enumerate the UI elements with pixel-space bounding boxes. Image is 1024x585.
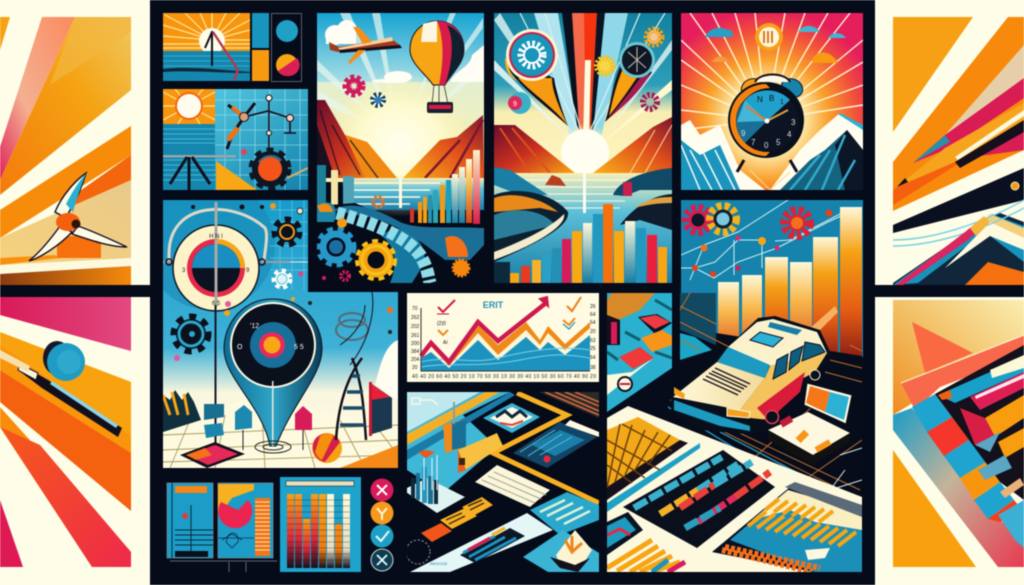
car hood xyxy=(673,362,765,410)
cream card with stripes xyxy=(410,513,553,572)
icon: alarm clock xyxy=(728,74,806,172)
icon: airplane xyxy=(329,27,402,64)
icon: blue disc xyxy=(43,341,85,381)
panel: colour table xyxy=(280,477,361,572)
icon: gold keyboard xyxy=(607,417,700,512)
y axis labels: 261 xyxy=(411,333,420,339)
mountains left xyxy=(317,100,397,178)
icon: alarm clock: N xyxy=(757,95,763,104)
table columns xyxy=(287,494,350,568)
orange block xyxy=(252,50,269,81)
y axis labels: 20 xyxy=(412,365,418,371)
icon: orange gear big xyxy=(360,244,392,276)
right axis labels: 25 xyxy=(590,346,596,352)
car side windows xyxy=(773,342,825,379)
mountains right xyxy=(403,115,484,178)
blue chevron layers xyxy=(893,213,1024,285)
icon: alarm clock: 9 xyxy=(741,129,746,138)
left pillars xyxy=(317,165,354,210)
icon: blue gear big xyxy=(321,232,351,262)
right axis labels xyxy=(590,304,596,371)
icon: laptop xyxy=(768,383,852,465)
icon: split circle xyxy=(276,54,300,76)
cream desk xyxy=(607,406,862,572)
car bumper xyxy=(674,400,750,431)
icon: teal check badge xyxy=(370,524,394,548)
trend line arrow xyxy=(421,297,548,362)
car roof xyxy=(728,319,827,366)
bar chart xyxy=(510,204,667,283)
icon: small target dot xyxy=(1011,182,1019,190)
icon: hot air balloon xyxy=(410,21,464,113)
area layers xyxy=(421,322,590,371)
gauge dial: 9 xyxy=(246,268,250,274)
icon: location pin with sun gear xyxy=(505,29,568,126)
scattered dots xyxy=(173,202,394,362)
post box xyxy=(443,402,466,453)
icon: tripod xyxy=(163,155,236,190)
y axis labels: 202 xyxy=(411,324,420,330)
gauge dial: H N I xyxy=(209,234,223,240)
car windshield xyxy=(717,347,770,378)
ball xyxy=(312,433,342,463)
icon: yellow sun middle xyxy=(597,58,613,74)
panel: sea sun with pole xyxy=(163,13,250,81)
panel: sun, pins and bar chart xyxy=(494,13,672,283)
horizontal black band left xyxy=(0,285,150,297)
label tags xyxy=(421,497,493,542)
icon: sun xyxy=(176,93,202,119)
small outlined icon xyxy=(412,398,438,405)
y axis labels: 70 xyxy=(412,306,418,312)
icon: red gear right xyxy=(785,211,809,235)
central black field xyxy=(150,0,875,585)
foreground hills xyxy=(317,202,484,283)
car side xyxy=(740,353,827,420)
right hills xyxy=(613,168,672,230)
icon: clouds blue and orange xyxy=(705,26,846,63)
y axis labels: 200 xyxy=(411,341,420,347)
panel: car and keyboards xyxy=(607,293,862,572)
icon: gold pen xyxy=(897,103,1024,187)
hatch corner xyxy=(539,392,599,418)
vertical pole xyxy=(214,305,216,455)
icon: black gear with orange hub xyxy=(252,151,308,187)
gold beam xyxy=(458,433,503,473)
floor grid xyxy=(162,414,399,469)
y axis labels: 204 xyxy=(411,357,420,363)
icon: alarm clock: 1 xyxy=(780,99,784,106)
right axis labels: 64 xyxy=(590,355,596,361)
icon: pen xyxy=(0,350,122,437)
gauge dial xyxy=(157,202,308,311)
colour bar chart tile xyxy=(712,482,862,572)
icon: car xyxy=(671,316,832,434)
y axis labels: 262 xyxy=(411,315,420,321)
icon: blue circle xyxy=(276,20,298,42)
icon: red dot xyxy=(241,149,247,155)
panel: large blue gauge and map pin xyxy=(162,199,399,469)
y axis labels xyxy=(411,306,420,371)
map pin xyxy=(224,299,322,453)
dark dotted circle xyxy=(406,540,430,564)
icon: crimson gear xyxy=(687,209,709,231)
dashboard screen xyxy=(513,420,599,468)
cream card with stripes: ARGOGE xyxy=(430,561,448,566)
mountains right xyxy=(593,117,672,173)
right screen xyxy=(218,483,273,558)
right axis labels: 63 xyxy=(590,338,596,344)
car red door xyxy=(757,372,805,422)
gauge dial: 6 5 xyxy=(212,301,221,307)
icon: gold triangle xyxy=(216,161,257,190)
map pin: 5 5 xyxy=(294,344,304,351)
teal keypad tile xyxy=(607,293,672,412)
chart dots xyxy=(692,210,832,296)
icon: crimson gear right xyxy=(643,95,657,109)
sun xyxy=(555,123,615,183)
car grille xyxy=(703,368,750,395)
left hills xyxy=(494,167,568,283)
mountains left xyxy=(494,125,575,173)
y axis labels: 384 xyxy=(411,349,420,355)
car sunroof xyxy=(750,332,783,347)
red dot xyxy=(182,513,188,519)
icon: crimson cross badge xyxy=(370,478,394,502)
pie xyxy=(218,500,252,528)
gauge dial: 3 xyxy=(182,268,186,274)
sketch xyxy=(218,533,254,548)
screen lines xyxy=(172,483,213,558)
panel: isometric dashboard xyxy=(403,392,599,572)
icon: orange badge xyxy=(370,502,394,524)
panel: plane, balloon and mountains xyxy=(317,13,484,283)
striped bottom tile xyxy=(607,535,700,572)
teal diamond xyxy=(483,403,540,433)
winding road xyxy=(337,213,430,283)
check marks left: A/ xyxy=(443,340,448,346)
small house cubes xyxy=(204,404,312,450)
right axis labels: 26 xyxy=(590,304,596,310)
icon: bubble left xyxy=(508,92,531,114)
check marks left: (2)0 xyxy=(437,321,446,327)
orange header xyxy=(175,486,207,493)
black divider strip xyxy=(672,293,680,423)
car wheels xyxy=(766,410,778,424)
network lines xyxy=(681,200,850,280)
orange top wedge xyxy=(218,484,254,512)
icon: dark cross badge xyxy=(371,549,393,571)
panel: two circles xyxy=(272,14,302,82)
rising bar chart xyxy=(410,150,480,224)
orange pen stroke xyxy=(808,306,838,338)
mountains xyxy=(681,113,863,190)
right axis labels: 54 xyxy=(590,320,596,326)
panel: sun, tripod and gear xyxy=(163,89,308,190)
horizontal black band right xyxy=(875,285,1024,297)
panel: left top sunburst with wind turbine xyxy=(0,17,131,285)
check marks left xyxy=(437,300,455,346)
icon: alarm clock: 5 xyxy=(776,138,781,147)
icon: small yellow sun top right xyxy=(647,30,661,44)
icon: second pin with clock xyxy=(605,42,655,122)
icon: rotor and linkage xyxy=(227,95,296,190)
car roof strip xyxy=(768,322,802,335)
row lines xyxy=(287,500,350,560)
icon: crimson gear xyxy=(347,79,361,93)
icon: alarm clock: 7 xyxy=(751,138,756,147)
icon: turbine base xyxy=(57,236,101,258)
right axis labels: 38 xyxy=(590,365,596,371)
white cloud right xyxy=(375,340,398,400)
sea xyxy=(494,173,672,283)
icon: blue gear xyxy=(373,95,383,105)
gold stripe xyxy=(407,392,500,445)
check marks right xyxy=(563,297,581,329)
y axis line xyxy=(421,308,590,371)
sun rays xyxy=(494,13,672,143)
panel: two blue screens xyxy=(167,483,273,558)
map pin: '12 xyxy=(250,323,259,330)
right axis labels: 64 xyxy=(590,312,596,318)
dark foreground xyxy=(317,203,484,283)
icon: alarm clock: 0 xyxy=(764,141,769,150)
car headlights xyxy=(727,408,750,418)
small dark chart corner xyxy=(607,512,643,555)
icon: pink pencil xyxy=(889,216,990,290)
chart title: ERIT xyxy=(483,300,504,310)
icon: red pen xyxy=(913,78,1024,163)
icon: wind turbine blades xyxy=(29,173,127,261)
colour swatches column xyxy=(912,394,1024,522)
x axis labels: 40 40 20 60 40 50 20 10 70 50 30 10 30 30 40 10 50 30 60 70 40 90 20 xyxy=(412,374,596,380)
icon: top target xyxy=(755,23,783,51)
gold frame xyxy=(493,393,599,503)
white gear xyxy=(275,272,289,286)
platform chart xyxy=(403,450,465,513)
icon: clouds xyxy=(325,20,484,83)
sea xyxy=(353,178,484,210)
black gear lower xyxy=(176,319,206,349)
icon: alarm clock: B xyxy=(769,94,774,103)
crayon stack xyxy=(935,345,1024,548)
map pin: O xyxy=(237,344,243,351)
icon: bubble left: 9 xyxy=(513,101,517,108)
card on floor xyxy=(180,442,245,468)
small gears xyxy=(322,197,469,280)
icon: alarm clock: 3 xyxy=(791,118,796,127)
cream lines panel xyxy=(475,465,550,507)
spiral ladder tower xyxy=(336,292,373,440)
panel: left bottom sunburst with pen xyxy=(0,297,131,567)
orange list column xyxy=(255,498,270,556)
panel: line chart xyxy=(407,293,599,382)
black wedge xyxy=(893,168,1024,233)
cube card xyxy=(523,530,599,572)
floor with grid lines xyxy=(668,293,862,500)
icon: gold gear xyxy=(711,207,735,231)
teal bars card xyxy=(530,492,599,535)
baseline ticks xyxy=(170,561,277,572)
dark spiky hills xyxy=(163,390,201,432)
icon: teal and red key block xyxy=(623,450,775,548)
black base xyxy=(175,551,208,557)
rising bars xyxy=(718,207,862,357)
red and navy box xyxy=(369,382,392,436)
panel: right bottom crayons xyxy=(893,300,1024,567)
panel: right top pens xyxy=(889,17,1024,290)
panel: gears, network lines and bars xyxy=(681,200,863,357)
light rays xyxy=(317,13,483,140)
blue block xyxy=(252,13,269,48)
right axis labels: 20 xyxy=(590,329,596,335)
panel: alarm clock sunburst xyxy=(681,13,863,190)
icon: alarm clock: 4 xyxy=(787,130,792,139)
icon: pole and bent arm xyxy=(205,31,238,80)
teal floor xyxy=(407,392,510,493)
header strip xyxy=(286,481,354,486)
black gear upper xyxy=(277,222,297,242)
